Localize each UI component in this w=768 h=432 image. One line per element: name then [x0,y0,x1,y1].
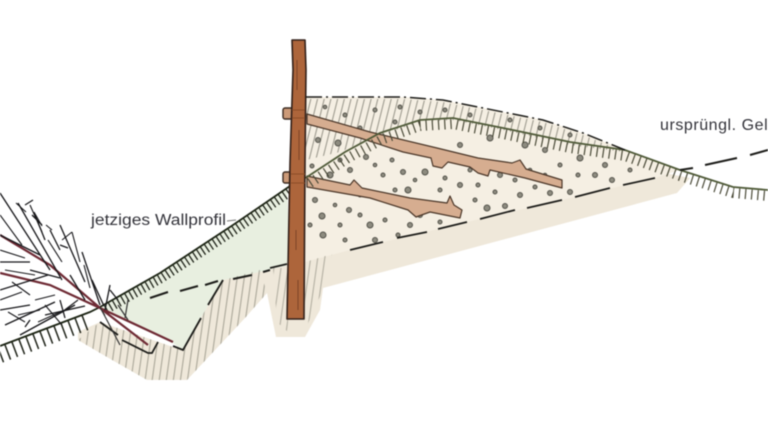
hatching at top of rampart [306,99,625,160]
dash-dot original rampart crest line [306,97,625,150]
label: jetziges Wallprofil: jetziges Wallprofil [90,212,226,229]
green wedge of eroded rampart [100,188,290,350]
beige subsoil layer [78,160,690,380]
cream rampart fill [305,97,680,262]
present wall profile line with ticks [0,186,290,355]
vertical wooden post [287,40,306,319]
stones in rampart fill [308,105,632,242]
green original turf line over the rampart and terrain [289,118,768,196]
log stubs behind the post [283,108,293,183]
lower horizontal log [307,176,462,218]
dashed original ground line [100,150,768,353]
upper horizontal log [307,114,562,188]
grey hatching in subsoil [78,254,332,380]
bare branches at left [0,193,173,345]
